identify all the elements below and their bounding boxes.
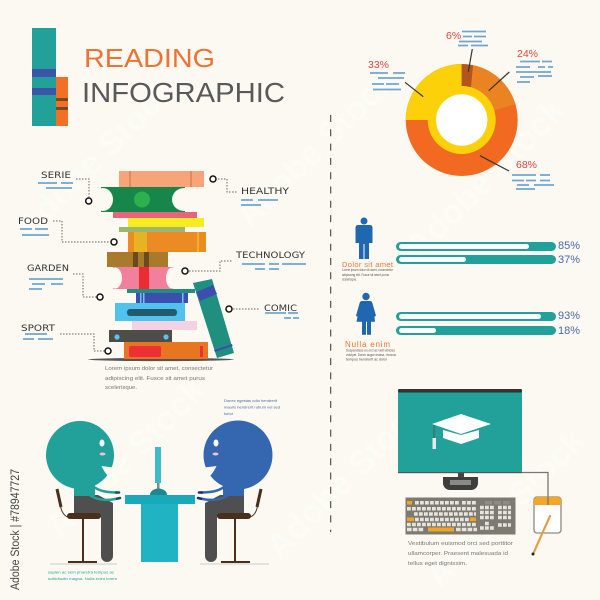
text: lorem ipsum: [105, 366, 213, 391]
text: vestibulum: ullamcorper. Praesent malesuada id: [408, 551, 508, 557]
bar: 37%: 37%: [558, 254, 580, 266]
text: blue caption: Donec egestas odio hendrerit: [224, 399, 278, 403]
label: technology: [182, 251, 306, 274]
text: blue caption: mauris hendrerit rutrum vel sed: [224, 406, 280, 410]
watermark: Adobe Stock: [9, 72, 183, 246]
label: garden: [27, 264, 103, 300]
label: healthy: [210, 176, 290, 205]
panel: male stats: [342, 218, 580, 282]
text: blue caption: tortor: [224, 412, 234, 416]
text: male caption: [342, 268, 394, 282]
label: comic: [226, 304, 299, 318]
keyboard: [406, 498, 516, 534]
text: lorem ipsum: adipiscing elit. Fusce sit amet purus: [105, 376, 205, 382]
label: food: [18, 217, 117, 245]
text: female caption: tempus hendrerit ac dolor: [346, 358, 388, 362]
figure: teal person: [46, 421, 120, 563]
bar: 93%: [396, 310, 580, 322]
watermark: Adobe Stock: [229, 62, 403, 236]
watermark: Adobe Stock: [39, 372, 213, 546]
text: female caption: Suspendisse eu orci ac velit ultricies: [346, 348, 395, 352]
divider: [330, 115, 332, 532]
label: healthy: HEALTHY: [241, 187, 290, 197]
bar: 93%: 93%: [558, 310, 580, 322]
drawing tablet with pen: [532, 497, 561, 556]
text: teal caption: sapien ac sem pharetra tempus ac: [48, 570, 114, 574]
title: INFOGRAPHIC: [82, 77, 285, 108]
bar: 37%: [396, 254, 580, 266]
icon: woman: [356, 293, 376, 335]
label: 24%: [516, 48, 553, 82]
label: 68%: 68%: [516, 159, 537, 171]
icon: title books: [32, 28, 68, 126]
watermark: Adobe Stock: [259, 392, 433, 566]
text: vestibulum: tellus eget dignissim.: [408, 561, 467, 567]
text: female caption: volutpat. Donec augue massa, rhoncus: [346, 353, 396, 357]
text: vestibulum: Vestibulum euismod orci sed porttitor: [408, 541, 513, 547]
icon: man: [356, 218, 372, 259]
label: sport: [21, 324, 111, 354]
watermark: Adobe Stock: [399, 92, 573, 266]
text: lorem ipsum: scelerisque.: [105, 385, 137, 391]
text: dolor sit amet: Dolor sit amet: [342, 260, 394, 269]
figure: blue person: [198, 420, 272, 563]
watermark: Adobe Stock: [419, 422, 593, 596]
label: technology: TECHNOLOGY: [235, 251, 306, 261]
label: serie: SERIE: [41, 171, 71, 181]
panel: female stats: [345, 293, 580, 362]
label: comic: COMIC: [264, 304, 297, 314]
text: female caption: [346, 348, 396, 362]
label: garden: GARDEN: [27, 264, 69, 274]
bar: 18%: [396, 325, 580, 337]
text: male caption: adipiscing elit. Fusce sit amet purus: [342, 273, 389, 277]
book stack: [88, 171, 234, 361]
label: 24%: 24%: [517, 48, 538, 60]
label: 68%: [512, 159, 554, 189]
floor lines: [50, 563, 269, 565]
title: [82, 43, 285, 108]
label: sport: SPORT: [21, 324, 56, 334]
label: food: FOOD: [18, 217, 48, 227]
bar: 18%: 18%: [558, 325, 580, 337]
text: male caption: Lorem ipsum dolor sit amet, consectetur: [342, 268, 394, 272]
text: nulla enim: Nulla enim: [345, 340, 390, 349]
text: teal caption: sollicitudin magna. Nulla enim lorem: [48, 577, 117, 581]
label: 6%: 6%: [446, 30, 461, 42]
donut chart: [405, 49, 518, 176]
bar: 85%: [396, 240, 580, 252]
label: 33%: 33%: [368, 59, 389, 71]
text: vestibulum: [408, 541, 513, 567]
label: 6%: [446, 30, 488, 46]
text: blue caption: [224, 399, 280, 416]
text: teal caption: [48, 570, 117, 581]
icon: graduation cap: [432, 414, 491, 449]
wire: [522, 472, 548, 504]
computer monitor: [398, 389, 522, 490]
stock credit: Adobe Stock | #78947727: [10, 469, 22, 590]
label: 33%: [368, 59, 405, 90]
text: male caption: scelerisque.: [342, 278, 357, 282]
text: lorem ipsum: Lorem ipsum dolor sit amet, consectetur: [105, 366, 213, 372]
desk with monitor: [125, 447, 195, 562]
label: serie: [38, 171, 92, 204]
title: READING: [84, 43, 215, 73]
bar: 85%: 85%: [558, 240, 580, 252]
